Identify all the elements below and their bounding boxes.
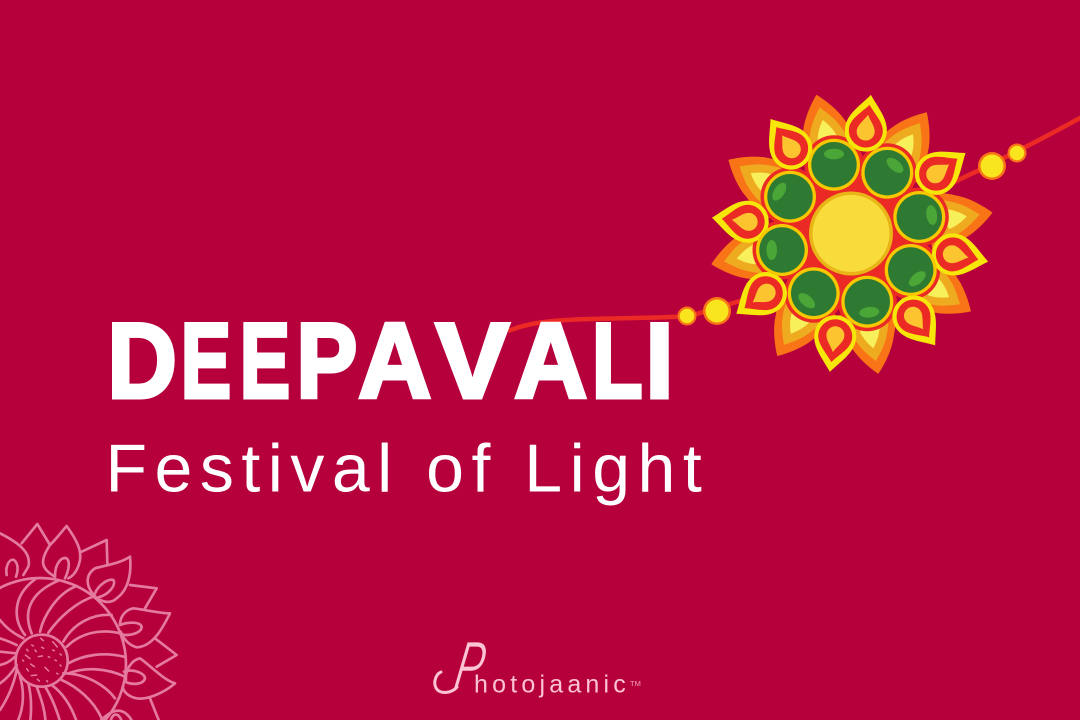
icon: right thread beads bbox=[978, 144, 1026, 180]
title: D bbox=[107, 300, 177, 420]
centre disc bbox=[809, 192, 893, 276]
title: L bbox=[592, 300, 643, 420]
logo letter P: P bbox=[449, 628, 491, 706]
logo trademark: TM bbox=[630, 679, 641, 688]
rakhi thread: right bbox=[950, 117, 1080, 184]
logo: Photojaanic bbox=[435, 628, 641, 706]
subtitle: Festival of Light bbox=[106, 431, 709, 507]
title: A bbox=[514, 300, 587, 420]
title: I bbox=[645, 300, 674, 420]
gem highlights bbox=[766, 149, 938, 319]
title: P bbox=[296, 300, 357, 420]
outer petals bbox=[0, 524, 177, 720]
logo wordmark: hotojaanic bbox=[474, 670, 630, 698]
rakhi thread: left bbox=[508, 298, 750, 331]
green gems bbox=[756, 139, 945, 328]
icon: left thread beads bbox=[678, 297, 731, 326]
outer orange petals bbox=[705, 88, 997, 379]
icon: rakhi flower bbox=[705, 88, 997, 379]
inner rays bbox=[0, 579, 125, 720]
centre specks bbox=[23, 638, 61, 682]
decorative line-art flower bbox=[0, 524, 177, 720]
title: A bbox=[358, 300, 431, 420]
title: E bbox=[240, 300, 290, 420]
title: E bbox=[181, 300, 231, 420]
ring and centre bbox=[0, 578, 126, 720]
red base with halos bbox=[752, 135, 949, 331]
yellow teardrop petals bbox=[710, 92, 992, 375]
logo swash bbox=[435, 672, 457, 692]
title: V bbox=[436, 300, 509, 420]
